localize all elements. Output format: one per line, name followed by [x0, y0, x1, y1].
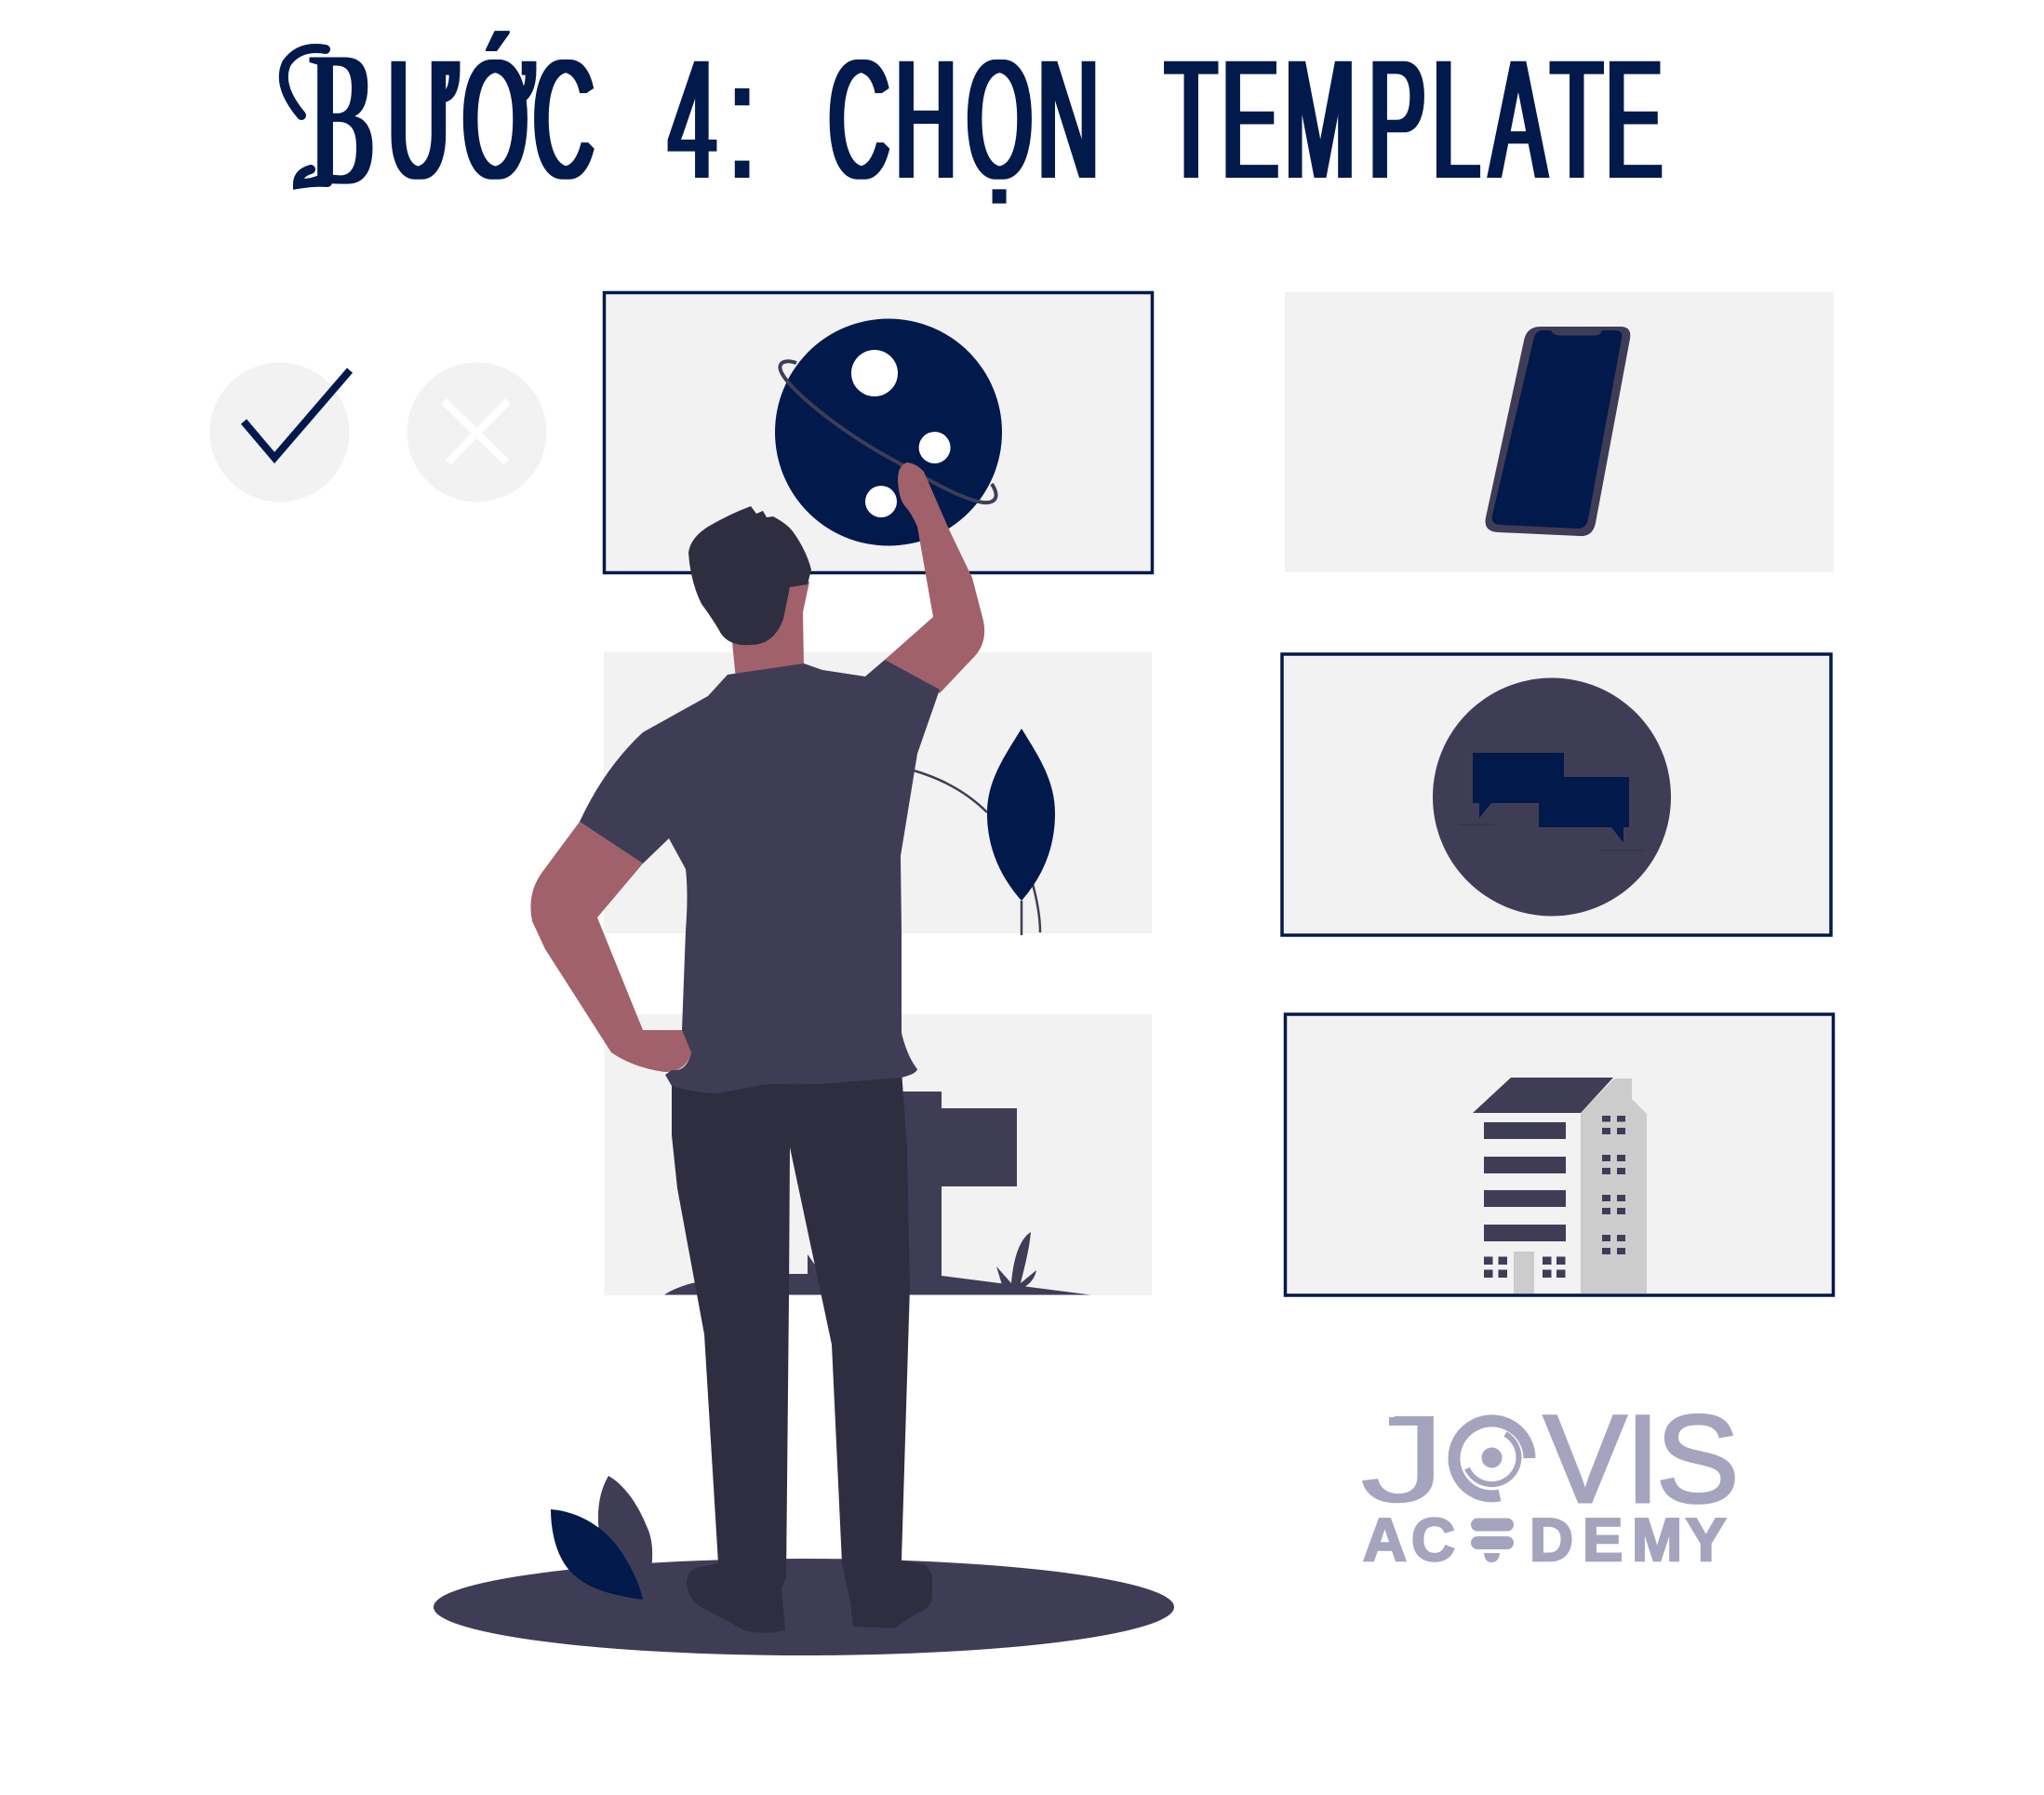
lower arm on hip [530, 822, 691, 1072]
logo wordmark ACADEMY: DEMY [1530, 1506, 1726, 1574]
panel: signpost template [605, 1014, 1152, 1295]
icon: check mark button [210, 363, 350, 502]
person looking at templates [530, 462, 984, 1633]
neck [731, 582, 809, 679]
icon: plant leaf [914, 729, 1055, 935]
icon: signpost and hill [664, 1092, 1090, 1295]
raised arm [885, 462, 984, 693]
panel: building template (selected) [1286, 1014, 1833, 1295]
panel: chat template (selected) [1282, 654, 1831, 935]
icon: chat bubbles [1433, 677, 1671, 916]
panel: plant template [604, 652, 1152, 935]
logo wordmark JOVIS: J [1359, 1388, 1447, 1529]
panel: planet template (selected) [605, 292, 1152, 573]
logo wordmark ACADEMY: AC [1363, 1506, 1455, 1574]
ground shadow [434, 1559, 1174, 1655]
t-shirt [580, 660, 940, 1093]
title: B [310, 13, 374, 226]
logo: Jovis Academy [1359, 1388, 1739, 1574]
panel: phone template [1285, 292, 1834, 572]
icon: ground leaves [551, 1476, 652, 1600]
logo wordmark JOVIS: VIS [1543, 1390, 1739, 1529]
icon: smartphone [1486, 327, 1630, 536]
title: ƯỚC 4: CHỌN TEMPLATE [388, 26, 1663, 214]
logo wordmark ACADEMY [1363, 1506, 1726, 1574]
legs and shoes [672, 1070, 932, 1633]
hair [688, 506, 811, 645]
icon: apartment building [1473, 1078, 1647, 1293]
logo wordmark JOVIS [1359, 1388, 1739, 1529]
icon: planet [775, 318, 1002, 545]
icon: cross button [407, 363, 547, 502]
